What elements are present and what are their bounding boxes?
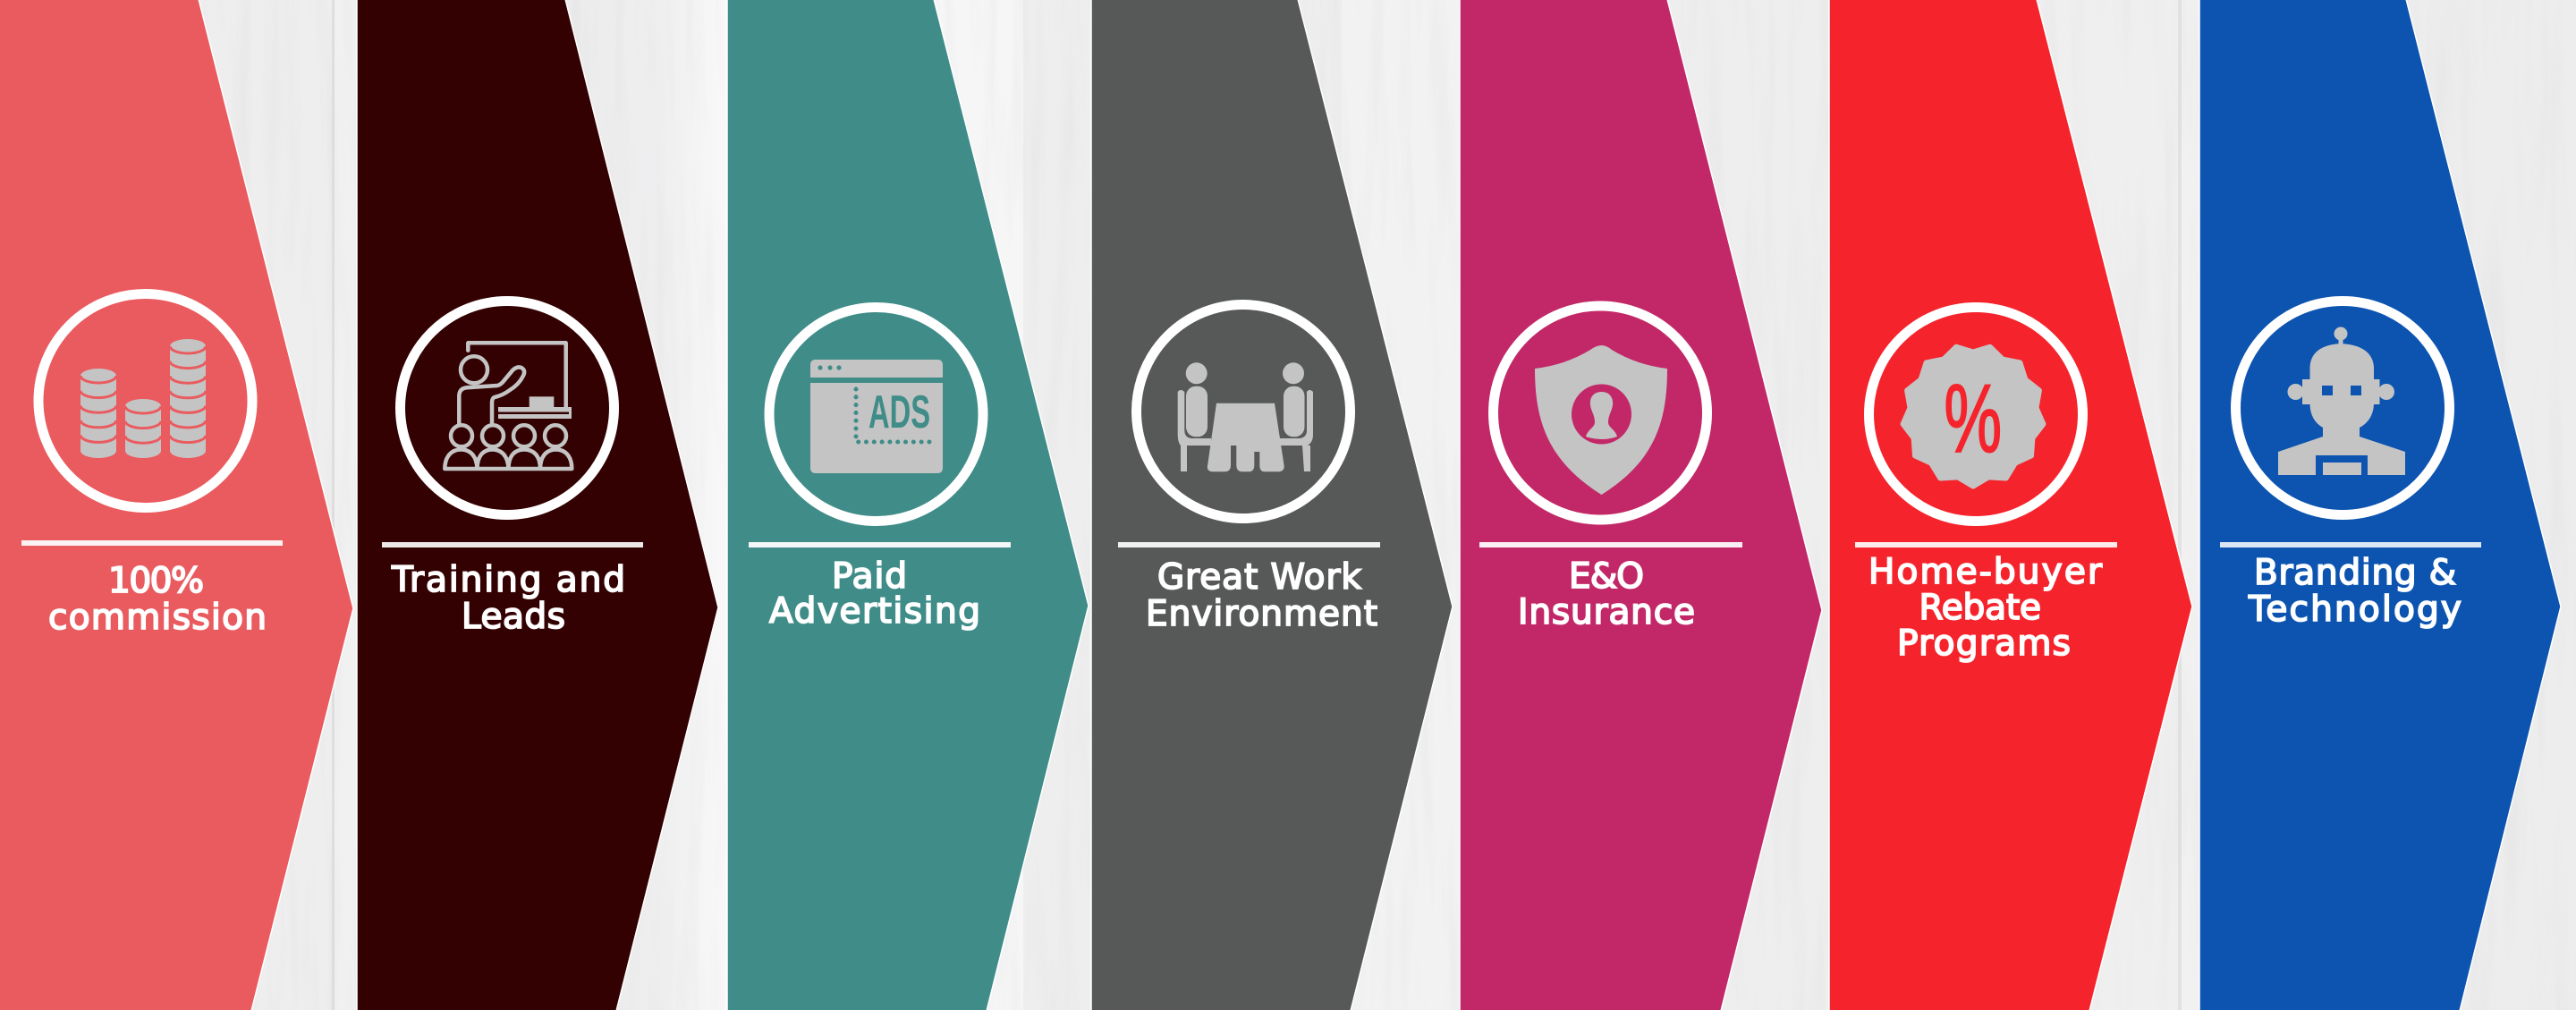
panel: 100% commission <box>0 0 353 1010</box>
icon ring: teacher <box>401 301 614 515</box>
icon ring: ads <box>769 308 983 521</box>
label: E&O Insurance: E&O <box>1569 556 1644 597</box>
divider: shield <box>1479 542 1742 547</box>
panel: Training and Leads <box>357 0 718 1010</box>
label: Branding & Technology: Technology <box>2248 590 2462 630</box>
divider: coins <box>21 540 283 546</box>
label: 100% commission <box>48 561 267 638</box>
icon: shield with person <box>1535 345 1667 495</box>
label: Home-buyer Rebate Programs: Programs <box>1897 624 2071 664</box>
divider: ads <box>749 542 1011 547</box>
label: Great Work Environment: Great Work <box>1157 557 1361 598</box>
icon ring: percent badge <box>1869 308 2082 521</box>
label: Branding & Technology: Branding & <box>2254 553 2456 593</box>
panel: E&O Insurance <box>1460 0 1822 1010</box>
panel: Branding & Technology <box>2199 0 2561 1010</box>
label: Home-buyer Rebate Programs: Rebate <box>1919 588 2041 628</box>
icon: teacher and students <box>445 343 572 469</box>
label: Paid Advertising: Advertising <box>769 591 980 632</box>
label: Paid Advertising <box>769 556 980 632</box>
label: Home-buyer Rebate Programs <box>1868 552 2103 664</box>
label: Training and Leads: Leads <box>462 597 565 637</box>
label: Training and Leads <box>391 560 625 637</box>
label: Home-buyer Rebate Programs: Home-buyer <box>1868 552 2103 592</box>
icon: percent badge: % <box>1945 364 2002 472</box>
label: 100% commission: 100% <box>108 561 204 601</box>
icon: ads browser window: ADS <box>869 386 930 438</box>
icon ring: shield <box>1494 306 1707 520</box>
icon: two people at table <box>1178 362 1313 471</box>
label: Great Work Environment <box>1146 557 1377 634</box>
icon: ads browser window <box>810 360 943 473</box>
icon: coin stacks <box>80 339 206 458</box>
divider: meeting <box>1118 542 1380 547</box>
icon ring: meeting <box>1136 304 1351 519</box>
panel: Paid Advertising <box>727 0 1089 1010</box>
icon: percent badge <box>1903 347 2043 487</box>
panel: Great Work Environment <box>1091 0 1453 1010</box>
label: Great Work Environment: Environment <box>1146 594 1377 634</box>
panel: Home-buyer Rebate Programs <box>1829 0 2192 1010</box>
icon ring: coins <box>38 293 252 508</box>
divider: teacher <box>382 542 643 547</box>
label: Training and Leads: Training and <box>391 560 625 600</box>
icon: robot <box>2278 327 2405 475</box>
label: E&O Insurance <box>1518 556 1695 632</box>
label: 100% commission: commission <box>48 598 267 638</box>
divider: robot <box>2220 542 2481 547</box>
divider: badge <box>1855 542 2117 547</box>
icon ring: robot <box>2236 301 2449 515</box>
label: Branding & Technology <box>2248 553 2462 630</box>
label: E&O Insurance: Insurance <box>1518 592 1695 632</box>
label: Paid Advertising: Paid <box>832 556 907 597</box>
